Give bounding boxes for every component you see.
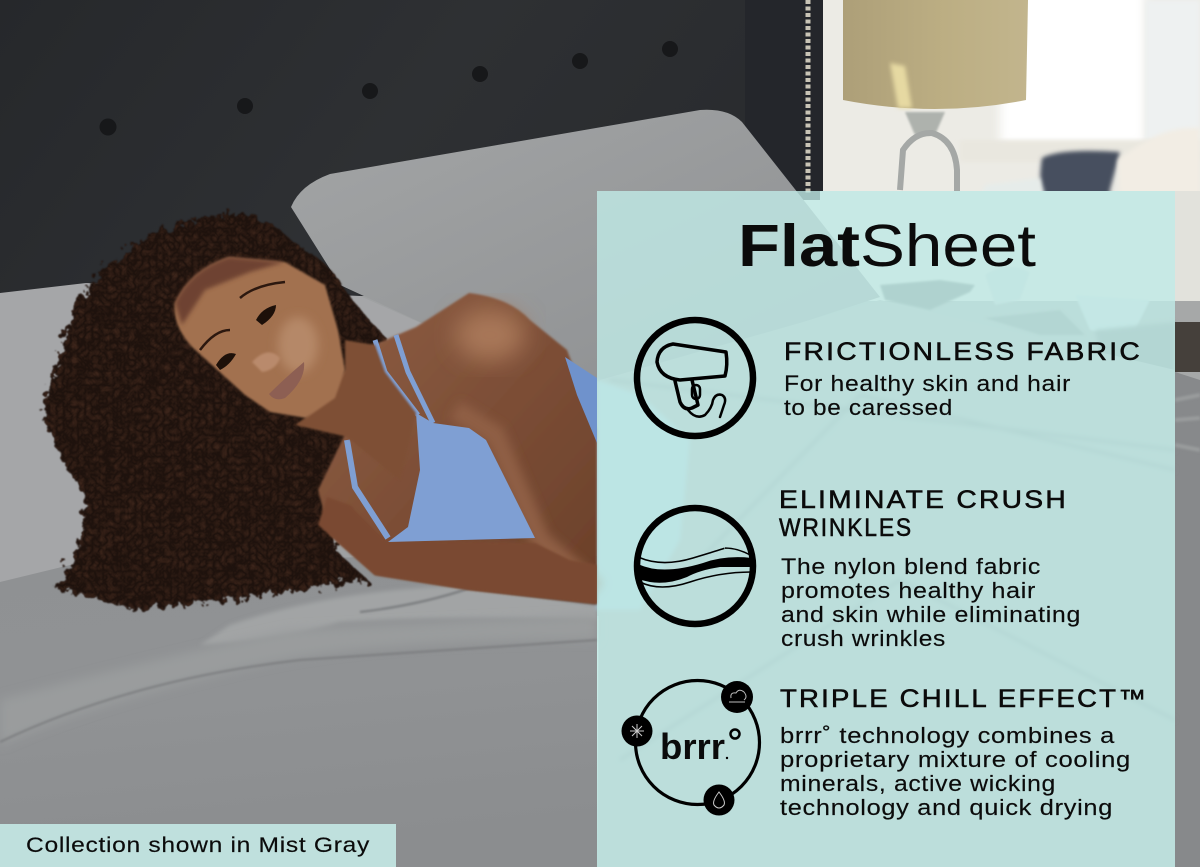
translucent panel xyxy=(597,191,1175,867)
headboard nail trim xyxy=(806,0,810,195)
text: eliminate crush wrinkles: crush wrinkles xyxy=(781,626,946,651)
text: frictionless fabric: For healthy skin and hair xyxy=(784,371,1071,396)
heading: eliminate crush wrinkles: WRINKLES xyxy=(779,514,913,542)
heading: frictionless fabric: FRICTIONLESS FABRIC xyxy=(784,338,1142,366)
heading: triple chill effect: TRIPLE CHILL EFFECT™ xyxy=(780,685,1148,713)
text: frictionless fabric xyxy=(784,371,1071,420)
heading: eliminate crush wrinkles: ELIMINATE CRUSH xyxy=(779,486,1068,514)
text: triple chill effect: technology and quick drying xyxy=(780,795,1113,820)
icon: brrr technology: brrr xyxy=(660,726,725,767)
text: triple chill effect: brrr˚ technology combines a xyxy=(780,723,1115,748)
icon: fabric layers xyxy=(636,508,753,624)
woman: blue tank top xyxy=(347,335,597,542)
text: triple chill effect: minerals, active wicking xyxy=(780,771,1056,796)
text: eliminate crush wrinkles xyxy=(781,554,1081,651)
title xyxy=(738,213,1036,279)
text: frictionless fabric: to be caressed xyxy=(784,395,953,420)
bed sheet xyxy=(0,300,1175,867)
icon: brrr technology xyxy=(622,680,760,816)
heading: eliminate crush wrinkles xyxy=(779,486,1068,542)
title: Sheet xyxy=(860,213,1036,279)
room detail at right xyxy=(600,128,1200,867)
lamp xyxy=(843,0,1028,192)
text: eliminate crush wrinkles: promotes healthy hair xyxy=(781,578,1036,603)
woman: curly hair xyxy=(42,214,388,610)
main pillow xyxy=(291,110,880,385)
text: triple chill effect xyxy=(780,723,1131,820)
text: eliminate crush wrinkles: The nylon blend fabric xyxy=(781,554,1041,579)
icon: hair dryer xyxy=(637,320,753,436)
title: Flat xyxy=(738,213,860,279)
left pillow xyxy=(0,283,425,590)
woman: arm, shoulder and torso skin xyxy=(318,293,597,604)
caption bar xyxy=(0,824,396,867)
woman: face xyxy=(175,257,416,480)
text: triple chill effect: proprietary mixture of cooling xyxy=(780,747,1131,772)
headboard tufting buttons xyxy=(100,41,678,136)
caption bar: Collection shown in Mist Gray xyxy=(26,833,370,857)
text: eliminate crush wrinkles: and skin while eliminating xyxy=(781,602,1081,627)
